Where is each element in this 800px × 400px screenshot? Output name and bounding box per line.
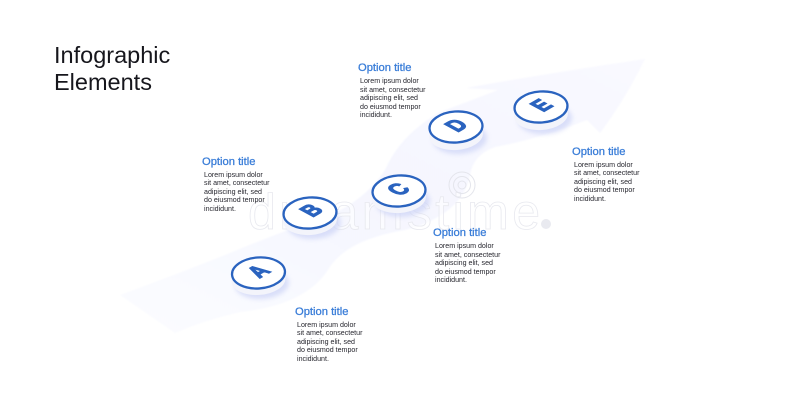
text block: option B: sit amet, consectetur [204,179,269,187]
text block: option B: do eiusmod tempor [204,196,265,204]
letter A: A [240,261,277,281]
text block: option E [572,146,640,203]
text block: option E: do eiusmod tempor [574,186,635,194]
text block: option D: sit amet, consectetur [360,86,425,94]
text block: option B: incididunt. [204,205,236,213]
coin D [428,110,488,156]
text block: option D: do eiusmod tempor [360,103,421,111]
text block: option B: Option title [202,156,255,168]
text block: option C: Lorem ipsum dolor [435,242,494,250]
text block: option C: Option title [433,227,486,239]
background arrow [120,59,645,333]
title: Infographic [54,42,170,68]
text block: option C: adipiscing elit, sed [435,259,493,267]
text block: option D: Option title [358,62,411,74]
text block: option E: incididunt. [574,195,606,203]
watermark: dreamstime [248,184,540,240]
text block: option A: adipiscing elit, sed [297,338,355,346]
coin E [513,90,573,136]
coin C [371,174,431,219]
text block: option A: incididunt. [297,355,329,363]
text block: option C: incididunt. [435,276,467,284]
coin A [231,256,290,301]
text block: option D: Lorem ipsum dolor [360,77,419,85]
text block: option D [358,62,426,119]
text block: option A: Lorem ipsum dolor [297,320,356,328]
title [54,42,170,95]
text block: option B: adipiscing elit, sed [204,188,262,196]
text block: option A: Option title [295,306,348,318]
title: Elements [54,69,152,95]
text block: option C: sit amet, consectetur [435,251,500,259]
text block: option A: do eiusmod tempor [297,346,358,354]
text block: option B: Lorem ipsum dolor [204,170,263,178]
text block: option C [433,227,500,284]
letter D: D [438,115,474,135]
text block: option D: adipiscing elit, sed [360,94,418,102]
text block: option E: Lorem ipsum dolor [574,160,633,168]
text block: option E: sit amet, consectetur [574,169,639,177]
coin B [282,196,342,241]
text block: option C: do eiusmod tempor [435,268,496,276]
text block: option E: adipiscing elit, sed [574,178,632,186]
text block: option A: sit amet, consectetur [297,329,362,337]
letter E: E [524,95,559,115]
text block: option D: incididunt. [360,111,392,119]
text block: option A [295,306,362,363]
text block: option E: Option title [572,146,625,158]
letter B: B [293,200,329,220]
letter C: C [380,179,416,199]
text block: option B [202,156,270,213]
